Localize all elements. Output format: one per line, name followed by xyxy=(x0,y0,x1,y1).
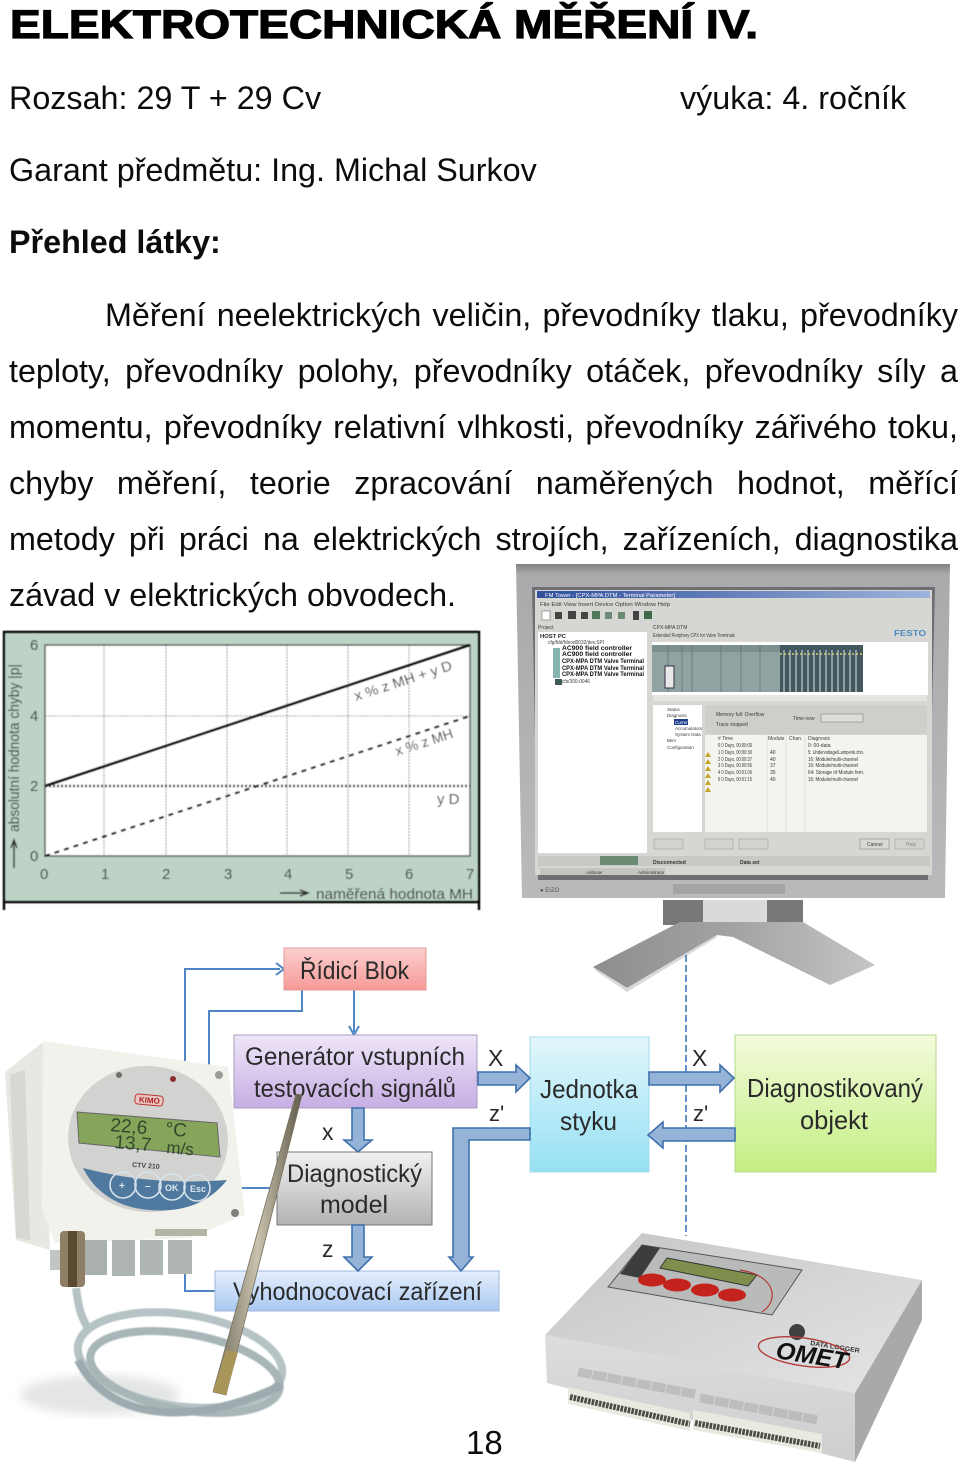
diagnostic event table: 4 0 Days, 00:01:06 xyxy=(718,770,752,776)
monitor stand xyxy=(593,900,875,992)
signal labels: X xyxy=(488,1045,503,1071)
box: diagnosed object xyxy=(735,1035,936,1172)
chart: absolute error vs measured value: y D xyxy=(437,791,460,808)
project tree panel: CPX-MPA DTM Valve Terminal xyxy=(562,666,644,672)
project tree panel: AC900 field controller xyxy=(562,646,633,652)
diagnostic event table: # Time xyxy=(718,736,733,742)
box: control block: Řídicí Blok xyxy=(300,956,409,985)
diagnostic tree xyxy=(653,705,703,832)
diagnostic event table: 5 0 Days, 00:01:15 xyxy=(718,777,752,783)
title: ELEKTROTECHNICKÁ MĚŘENÍ IV. xyxy=(10,1,758,47)
box: test signal generator: Generátor vstupních xyxy=(245,1043,465,1071)
chart: absolute error vs measured value: absolutní hodnota chyby |p| xyxy=(7,664,23,832)
project tree panel: cfs/300-0046 xyxy=(562,679,590,685)
monitor with diagnostic software: ● EIZO xyxy=(540,888,560,894)
COMET logo xyxy=(756,1324,860,1376)
diagnostic event table: 5: Undervoltage/Lampenk.chn. xyxy=(808,750,864,756)
diagnostic event table: 0: 00-data xyxy=(808,743,831,749)
signal labels xyxy=(322,1045,708,1262)
chart: absolute error vs measured value: 2 xyxy=(30,778,38,795)
chart: absolute error vs measured value: 6 xyxy=(405,866,413,883)
diagnostic tree: Accumulators xyxy=(675,726,703,731)
software window: Project xyxy=(538,625,554,631)
project tree panel xyxy=(538,632,647,853)
software window xyxy=(535,590,932,875)
signal labels: X xyxy=(692,1045,707,1071)
keypad buttons: Esc xyxy=(190,1184,206,1194)
signal labels: x xyxy=(322,1119,334,1145)
diagnostic tree: Diagnosis xyxy=(667,713,688,718)
software window: File Edit View Insert Device Option Window Help xyxy=(540,602,670,608)
status bar: Administrator xyxy=(638,870,665,875)
signal labels: z' xyxy=(693,1101,708,1126)
keypad buttons: OK xyxy=(165,1183,179,1193)
diagnostic tree: System Data xyxy=(675,732,701,737)
box: interface unit xyxy=(530,1037,649,1172)
dialog buttons xyxy=(654,839,924,849)
box: evaluation device: Vyhodnocovací zařízení xyxy=(233,1278,482,1306)
chart: absolute error vs measured value: 4 xyxy=(284,866,292,883)
text: year of study: výuka: 4. ročník xyxy=(680,80,906,116)
diagnostic event table: Trace stopped xyxy=(716,722,748,728)
keypad buttons: + xyxy=(119,1181,125,1192)
temperature probe xyxy=(213,1094,302,1395)
monitor with diagnostic software xyxy=(516,564,950,992)
festo header: FESTO xyxy=(894,628,926,638)
box: control block xyxy=(284,948,426,990)
diagnostic event table: 40 xyxy=(770,757,776,763)
software window: FM Tower - [CPX-MPA DTM - Terminal Parameter] xyxy=(545,593,676,599)
box: diagnosed object: Diagnostikovaný xyxy=(747,1073,923,1103)
transmitter housing xyxy=(5,1041,245,1250)
display face: KIMO xyxy=(139,1095,160,1106)
diagnostic tree: Bkm xyxy=(667,738,676,743)
diagnostic event table: Time now xyxy=(793,716,815,722)
dialog buttons: Help xyxy=(906,842,917,848)
block diagram xyxy=(185,948,936,1311)
diagnostic event table: Chan. xyxy=(789,736,802,742)
signal labels: z xyxy=(322,1236,334,1262)
keypad buttons xyxy=(110,1172,210,1201)
chart: absolute error vs measured value: 4 xyxy=(30,708,38,725)
text block: syllabus overview: Měření neelektrických veličin, převodníky tlaku, převodníky xyxy=(105,297,958,333)
diagnostic event table: 0 0 Days, 00:00:00 xyxy=(718,743,752,749)
floor shadow xyxy=(20,1375,180,1415)
diagnostic event table xyxy=(705,705,927,832)
diagnostic event table: 1 0 Days, 00:00:30 xyxy=(718,750,752,756)
text block: syllabus overview: teploty, převodníky polohy, převodníky otáček, převodníky síly a xyxy=(9,353,958,389)
diagnostic tree: Configuration xyxy=(667,745,694,750)
text block: syllabus overview xyxy=(9,297,958,613)
diagnostic event table: 37 xyxy=(770,763,776,769)
box: diagnosed object: objekt xyxy=(800,1105,869,1135)
display face: CTV 210 xyxy=(132,1162,160,1171)
chart: absolute error vs measured value: 5 xyxy=(345,866,353,883)
chart: absolute error vs measured value: 1 xyxy=(101,866,109,883)
display face: 22,6 xyxy=(110,1115,148,1139)
festo header: CPX-MPA DTM xyxy=(653,625,687,631)
device: COMET data logger xyxy=(545,1233,922,1462)
cable glands xyxy=(50,1231,192,1287)
block arrows xyxy=(344,1065,735,1271)
chart: absolute error vs measured value: 3 xyxy=(224,866,232,883)
box: test signal generator xyxy=(234,1035,477,1108)
diagnostic event table: 3 0 Days, 00:00:56 xyxy=(718,763,752,769)
signal labels: z' xyxy=(489,1101,504,1126)
dialog buttons: Cancel xyxy=(867,842,883,848)
diagnostic tree: Current xyxy=(675,720,691,725)
dashed connection from monitor xyxy=(685,955,687,1236)
diagnostic event table: 64: Storage of Module fem. xyxy=(808,770,864,776)
box: diagnostic model: model xyxy=(320,1191,388,1219)
diagnostic event table: 16: Module/multi-channel xyxy=(808,757,858,763)
keypad panel xyxy=(608,1245,802,1315)
display face: m/s xyxy=(166,1138,195,1159)
box: interface unit: Jednotka xyxy=(540,1074,638,1104)
terminal blocks xyxy=(568,1372,822,1453)
chart: absolute error vs measured value: 7 xyxy=(466,866,474,883)
page number: 18 xyxy=(466,1424,503,1461)
chart: absolute error vs measured value: x % z MH + y D xyxy=(352,657,454,704)
project tree panel: CPX-MPA DTM Valve Terminal xyxy=(562,659,644,665)
status bar: Data set xyxy=(740,860,760,866)
diagnostic event table: Memory full: Overflow xyxy=(716,712,765,718)
pneumatic tube coil xyxy=(72,1288,288,1426)
chart: absolute error vs measured value xyxy=(4,632,479,910)
heading: overview: Přehled látky: xyxy=(9,224,221,260)
chart: absolute error vs measured value: 0 xyxy=(30,848,38,865)
box: diagnostic model: Diagnostický xyxy=(287,1160,422,1188)
diagnostic event table: 16: Module/multi-channel xyxy=(808,763,858,769)
diagnostic event table: 40 xyxy=(770,777,776,783)
chart: absolute error vs measured value: 6 xyxy=(30,637,38,654)
keypad buttons: – xyxy=(145,1181,151,1192)
text block: syllabus overview: chyby měření, teorie zpracování naměřených hodnot, měřící xyxy=(9,465,958,501)
chart: absolute error vs measured value: naměřená hodnota MH xyxy=(316,887,473,903)
diagnostic event table: 40 xyxy=(770,750,776,756)
text: course scope: Rozsah: 29 T + 29 Cv xyxy=(9,80,321,116)
project tree panel: cfg/fdd/fdnod0032/dev.SPI xyxy=(548,640,604,646)
festo header: Extended Periphery CPX for Valve Terminals xyxy=(653,633,735,639)
project tree panel: HOST PC xyxy=(540,634,566,640)
display face: °C xyxy=(165,1119,188,1142)
diagnostic event table: Diagnosis xyxy=(808,736,830,742)
monitor bezel xyxy=(516,564,950,898)
project tree panel: CPX-MPA DTM Valve Terminal xyxy=(562,672,644,678)
diagnostic event table: 35 xyxy=(770,770,776,776)
status bar: Disconnected xyxy=(653,860,686,866)
diagnostic event table: 2 0 Days, 00:00:37 xyxy=(718,757,752,763)
display face xyxy=(61,1058,235,1220)
text: course guarantor: Garant předmětu: Ing. Michal Surkov xyxy=(9,152,537,188)
diagnostic event table: Module xyxy=(768,736,785,742)
diagnostic event table: 16: Module/multi-channel xyxy=(808,777,858,783)
COMET logo: DATA LOGGER xyxy=(810,1340,860,1355)
project tree panel: AC900 field controller xyxy=(562,652,633,658)
chart: absolute error vs measured value: x % z MH xyxy=(393,725,455,759)
thin control connections xyxy=(185,963,359,1291)
display face: 13,7 xyxy=(114,1132,152,1156)
chart: absolute error vs measured value: 2 xyxy=(162,866,170,883)
box: diagnostic model xyxy=(277,1152,432,1225)
diagnostic tree: Status xyxy=(667,707,681,712)
text block: syllabus overview: metody při práci na elektrických strojích, zařízeních, diagnostika xyxy=(9,521,958,557)
text block: syllabus overview: závad v elektrických obvodech. xyxy=(9,577,456,613)
box: interface unit: styku xyxy=(560,1106,617,1136)
COMET logo: OMET xyxy=(774,1337,852,1376)
terminal module diagram xyxy=(652,642,928,695)
chart: absolute error vs measured value: 0 xyxy=(40,866,48,883)
status bar xyxy=(538,856,930,875)
box: evaluation device xyxy=(215,1271,499,1311)
text block: syllabus overview: momentu, převodníky relativní vlhkosti, převodníky zářivého toku, xyxy=(9,409,958,445)
festo header xyxy=(653,625,926,639)
box: test signal generator: testovacích signálů xyxy=(254,1075,456,1103)
device: KIMO transmitter with probe xyxy=(5,1041,302,1426)
status bar: Adduser xyxy=(586,870,603,875)
